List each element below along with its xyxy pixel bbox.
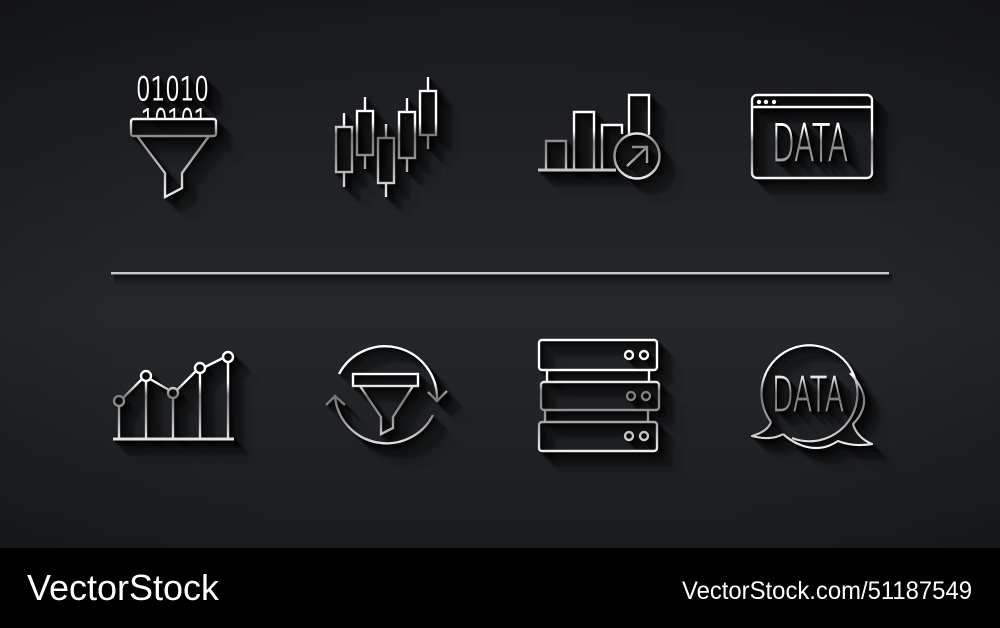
image url: VectorStock.com/51187549 xyxy=(682,577,972,605)
brand name: VectorStock xyxy=(27,567,220,608)
icon: candlestick chart xyxy=(336,77,436,197)
icon: funnel with refresh arrows xyxy=(326,346,447,443)
icon: server stack xyxy=(539,340,659,451)
binary digits top row: 01010 xyxy=(136,70,209,108)
icon: line chart with points xyxy=(113,352,234,439)
icon: speech bubbles with DATA xyxy=(752,345,872,448)
icon: bar chart with growth arrow xyxy=(538,95,660,178)
DATA label: DATA xyxy=(772,367,844,423)
icon: binary data funnel xyxy=(131,70,216,197)
binary digits passing into funnel: 10101 xyxy=(141,102,207,140)
icon: browser window with DATA xyxy=(752,95,872,178)
DATA label: DATA xyxy=(772,114,848,174)
divider line xyxy=(111,272,892,286)
watermark bar xyxy=(0,548,1000,628)
